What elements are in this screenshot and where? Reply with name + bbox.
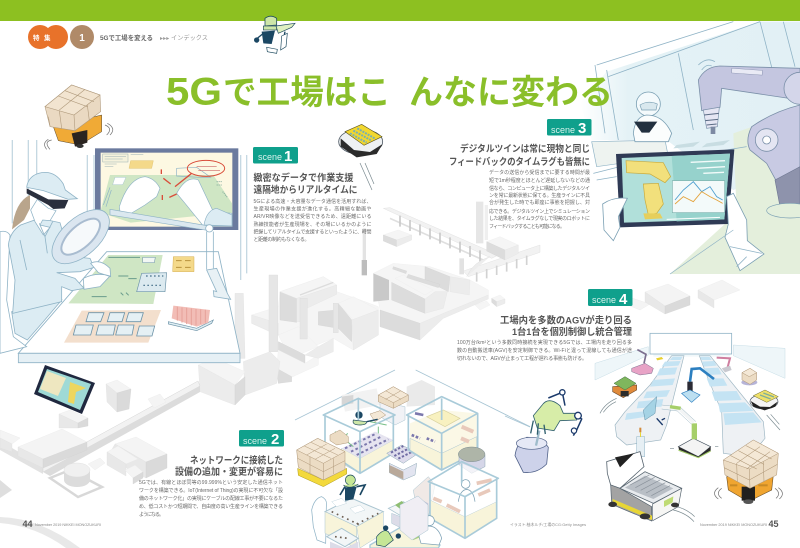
scene 2 label: 2 — [271, 431, 279, 448]
scene 2 body text: ようになる。 — [139, 511, 164, 518]
illustration: storage tank — [64, 463, 90, 487]
robot above table — [340, 475, 365, 501]
scene 2 body text: 5Gでは、有線とほぼ同等の99.999%という安定した通信ネット — [139, 479, 283, 486]
scene 2 heading — [175, 454, 283, 478]
scene 2 body text: め、低コストかつ短期間で、自由度の高い生産ラインを構築できる — [139, 503, 283, 510]
left folio: November 2019 NIKKEI MONOZUKURI — [35, 523, 101, 527]
scene 3 heading: フィードバックのタイムラグも皆無に — [449, 156, 590, 168]
robot arm on tablet screen — [626, 161, 671, 219]
worker silhouette left — [312, 497, 327, 543]
illustration: motion lines — [360, 163, 374, 190]
scene 1 heading: 緻密なデータで作業支援 — [254, 172, 354, 184]
scene 3 body text: 短で1m秒程度とほとんど遅延しないなどの通 — [489, 177, 590, 184]
illustration: yellow AGV top centre — [339, 124, 383, 157]
illustration: hands holding tablet — [603, 193, 764, 274]
scene 1 label: scene — [258, 152, 282, 162]
illustration: lower left factory blocks — [0, 380, 167, 497]
scene 2 body text: 備のネットワーク化」の実現にケーブルの配線工事が不要になるた — [139, 495, 283, 502]
worker foreground — [419, 516, 442, 545]
illustration: factory conveyors and main plant — [198, 202, 540, 405]
top conveyor bridge — [383, 208, 540, 282]
scene 4 body text — [457, 339, 632, 362]
illustration: right factory blocks — [625, 280, 740, 314]
illustration: large robot arm — [698, 60, 800, 218]
assembly cell B — [407, 397, 478, 470]
peach component pad — [64, 310, 161, 343]
floor outline — [295, 370, 530, 427]
scene 4 label — [588, 289, 632, 308]
magnifier ring lamp — [42, 200, 231, 299]
scene 1 body text: AR/VR映像などを送受信できるため、遠距離にいる — [254, 213, 372, 220]
illustration: AGV production line — [595, 333, 785, 522]
chips on pad — [73, 313, 155, 336]
right conveyor lane — [699, 356, 765, 457]
scene 3 body text: フィードバックすることも可能になる。 — [489, 223, 565, 230]
main title — [166, 70, 613, 114]
scene 2 body text — [139, 479, 283, 518]
illustration: top floating robot — [254, 16, 295, 53]
scene 3 body text: ンを常に最新状態に保てる。生産ラインに不具 — [489, 192, 590, 199]
scene 4 body text: 100万台/km²という多数同時接続を実現できる5Gでは、工場内を走り回る多 — [457, 339, 632, 346]
central plant — [373, 263, 505, 340]
scene 2 heading: ネットワークに接続した — [190, 454, 283, 466]
illustration: work scene — [0, 140, 247, 363]
box stack on yellow pallet — [297, 438, 347, 487]
scene 3 label: 3 — [578, 120, 586, 137]
scene 3 body text: データの送信から受信までに要する時間が最 — [489, 169, 590, 176]
scene 1 body text: 生産現場の作業支援が進化する。高精細な動画や — [254, 206, 372, 212]
cell C right edge and lower scene — [400, 496, 428, 540]
pink robot right — [717, 358, 732, 372]
small table with green parts — [388, 501, 418, 530]
scene 1 body text — [254, 198, 372, 243]
scene 2 label — [239, 430, 284, 448]
box AGV lower right — [714, 440, 782, 504]
carton on cart — [378, 387, 408, 425]
stair section — [278, 327, 318, 358]
scene 1 body text: 把握してリアルタイムで支援するといったように、時間 — [254, 228, 372, 236]
pink robot AGV — [632, 350, 653, 375]
scene 1 heading — [254, 172, 358, 196]
scene 4 label: 4 — [619, 291, 628, 308]
illustration credit: イラスト:柚木ルチ/工場のCG:Getty Images — [510, 522, 586, 527]
assembly cell C — [428, 462, 498, 538]
illustration: clean room worker — [633, 92, 672, 142]
scene 1 label: 1 — [284, 148, 292, 165]
main title: で工場はこ — [223, 74, 391, 112]
feature badge: 特 — [33, 33, 40, 42]
scene 3 label — [547, 119, 592, 137]
yellow top AGV right — [750, 390, 778, 410]
monitoring screen — [95, 148, 238, 230]
large autonomous cart — [607, 428, 682, 521]
green arm on AGV — [662, 405, 711, 458]
illustration: lower left factory conveyor — [0, 381, 200, 548]
illustration: window room top right — [580, 22, 800, 274]
breadcrumb text: 5Gで工場を変える — [100, 33, 153, 42]
small blocks around conveyor — [383, 202, 518, 260]
illustration: floating gripper robot and bucket — [515, 390, 582, 473]
assembly cell A — [323, 398, 395, 473]
scene 3 heading: デジタルツインは常に現物と同じ — [460, 143, 590, 155]
left conveyor lane — [615, 356, 684, 445]
scene 2 heading: 設備の追加・変更が容易に — [175, 466, 283, 478]
chip tray — [137, 273, 167, 292]
scene 4 body text: 切れないので、AGVが止まって工程が遅れる事態も防げる。 — [457, 355, 587, 362]
right folio: November 2019 NIKKEI MONOZUKURI — [700, 523, 767, 527]
feature badge — [28, 25, 68, 49]
top green band — [0, 0, 800, 21]
chart on tablet screen — [672, 181, 725, 213]
illustration: digital twin tablet — [616, 149, 734, 227]
wall posts — [12, 140, 37, 223]
feature badge: 集 — [44, 33, 51, 42]
scene 1 heading: 遠隔地からリアルタイムに — [254, 184, 358, 196]
scene 3 body text: 合が発生した時でも即座に事態を把握し、対 — [489, 199, 590, 206]
scene 1 body text: と距離の制約もなくなる。 — [254, 236, 310, 243]
parts machine — [387, 445, 418, 480]
green circuit board — [68, 255, 163, 304]
lamp post — [362, 228, 367, 275]
machine beside cell C — [413, 477, 435, 517]
chapter number badge: 1 — [79, 33, 85, 44]
scene 3 label: scene — [551, 125, 575, 135]
small box AGV — [741, 368, 757, 385]
scene 4 heading: 1台1台を個別制御し統合管理 — [512, 326, 632, 338]
scene 4 heading — [500, 314, 632, 338]
scene 4 heading: 工場内を多数のAGVが走り回る — [500, 314, 632, 326]
motion lines — [600, 398, 780, 522]
small tray foreground — [327, 528, 358, 548]
pointer line to floating robot — [505, 416, 530, 427]
green top AGV — [613, 377, 637, 398]
work table — [18, 252, 240, 363]
scene 3 heading — [449, 143, 590, 168]
illustration: box carrying AGV top left — [45, 85, 113, 149]
illustration: production floor and cells — [295, 370, 530, 548]
scene 2 body text: ワークを構築できる。IoT(Internet of Thing)の実現に不可欠な「設 — [139, 487, 283, 494]
small yellow cart — [656, 357, 663, 360]
robot and bench foreground — [370, 525, 440, 548]
section header — [28, 25, 153, 49]
back block — [342, 380, 435, 412]
stacks — [235, 293, 245, 358]
scene 2 label: scene — [243, 436, 267, 446]
scene 4 label: scene — [592, 295, 616, 305]
scene 4 body text: 数の自動搬送車(AGV)を安定制御できる。Wi-Fiと違って混線しても通信が途 — [457, 347, 632, 354]
scene 3 body text: 応できる。デジタルツイン上でシミュレーション — [489, 208, 590, 215]
near block — [243, 352, 280, 395]
scene 3 body text: した結果を、タイムラグなしで現実のロボットに — [489, 215, 590, 222]
main title: んなに変わる — [409, 74, 613, 112]
engineer with AR glasses — [0, 172, 111, 353]
scene 1 label — [253, 147, 298, 165]
scene 3 body text — [489, 169, 590, 230]
scene 1 body text: 熟練技能者が生産現場を、その場にいるかのように — [254, 221, 372, 228]
grey bucket machine — [458, 447, 485, 473]
assembly table D — [325, 498, 383, 548]
scene 1 body text: 5Gによる高速・大容量なデータ通信を活用すれば、 — [254, 198, 372, 205]
side walls — [595, 345, 785, 380]
breadcrumb index: ▸▸▸ インデックス — [160, 34, 208, 42]
illustration: small tablet lower left — [34, 365, 95, 414]
back wall — [650, 333, 732, 354]
left page number: 44 — [22, 519, 33, 529]
main title: 5G — [166, 70, 222, 114]
right page number: 45 — [768, 519, 779, 529]
scene 3 body text: 信なら、コンピュータ上に構築したデジタルツイ — [489, 185, 590, 192]
pink component block — [168, 306, 213, 331]
left plant — [198, 275, 378, 405]
blue robot arm — [682, 368, 714, 402]
yellow component tray — [173, 257, 194, 272]
